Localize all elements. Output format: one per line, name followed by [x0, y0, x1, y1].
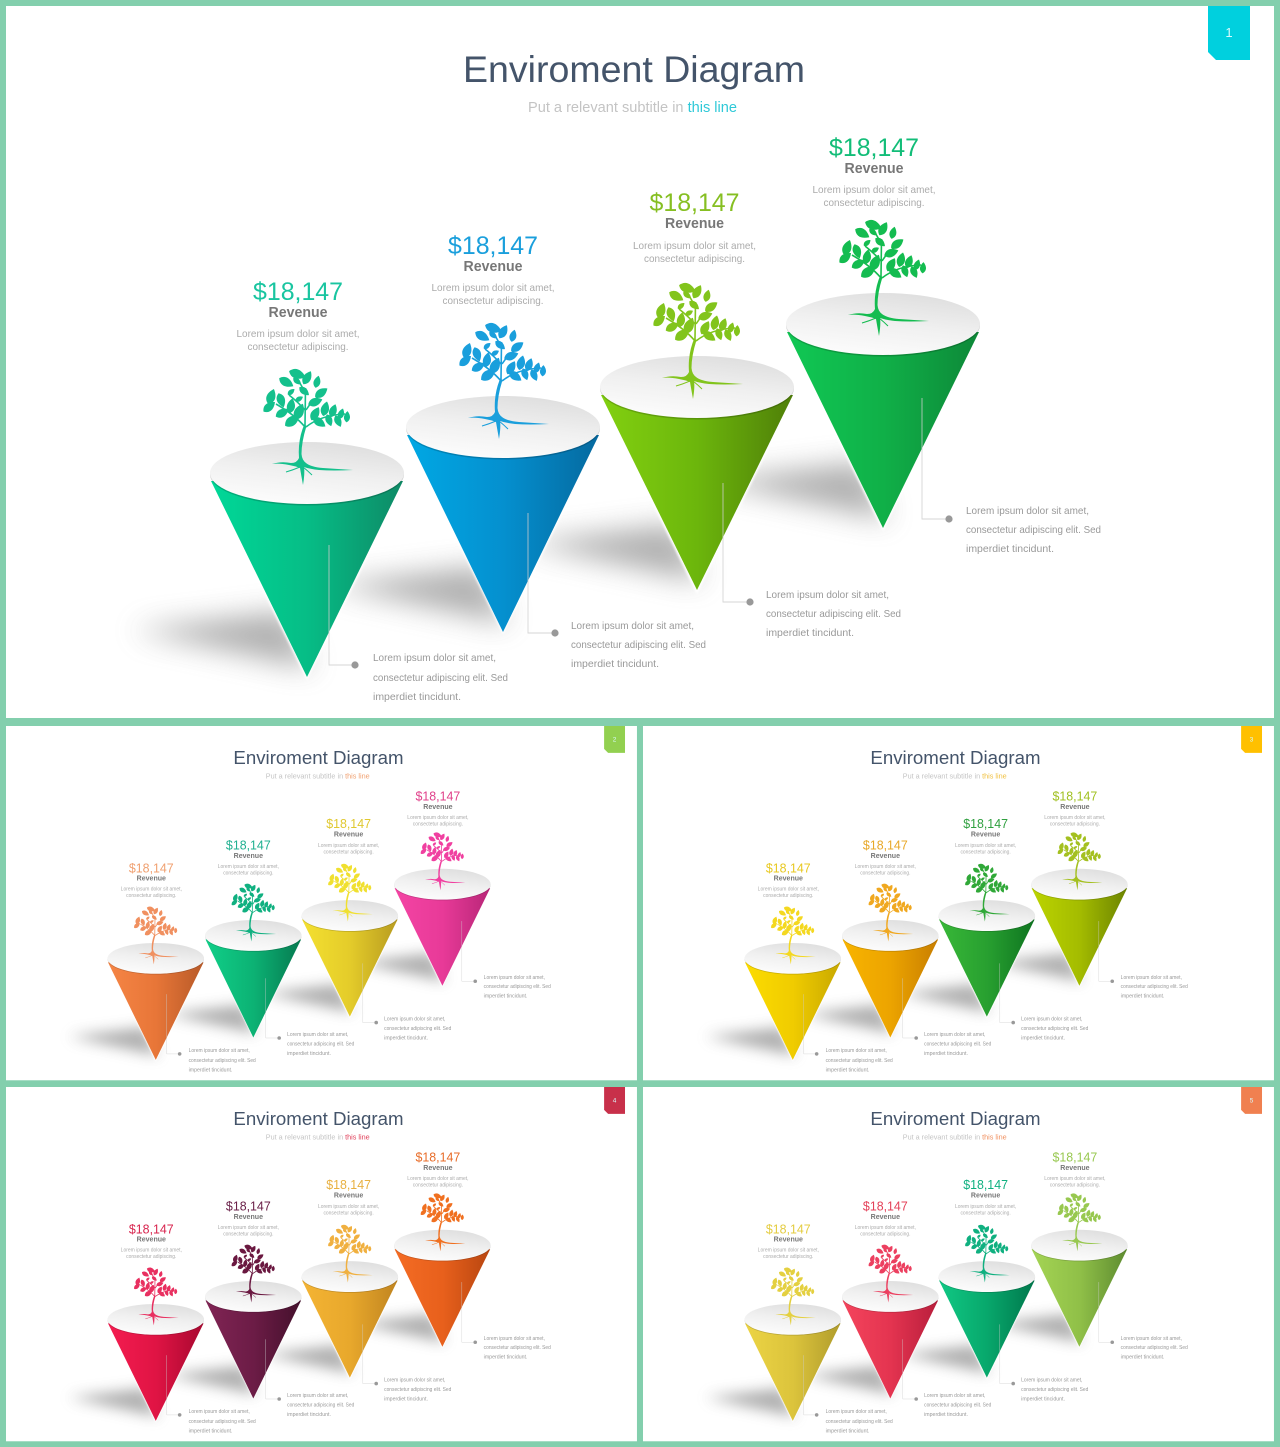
callout 4	[1099, 921, 1188, 1000]
value label 2: Revenue	[871, 1212, 900, 1221]
subtitle: Put a relevant subtitle in this line	[266, 772, 370, 781]
callout 1: consectetur adipiscing elit. Sed	[189, 1419, 256, 1425]
callout 4: imperdiet tincidunt.	[484, 1355, 527, 1361]
callout 3: consectetur adipiscing elit. Sed	[766, 608, 901, 620]
cone 3 with tree	[302, 1224, 398, 1378]
callout 3	[723, 483, 901, 639]
value label 3: consectetur adipiscing.	[960, 1210, 1011, 1216]
cone 2 with tree	[205, 1244, 302, 1398]
page badge	[604, 1087, 625, 1114]
cone 4 with tree	[1031, 1192, 1128, 1347]
title: Enviroment Diagram	[870, 747, 1041, 768]
value label 2: $18,147	[226, 838, 271, 852]
callout 2: imperdiet tincidunt.	[924, 1051, 968, 1057]
value label 1: Revenue	[774, 874, 803, 883]
cone 2 with tree	[842, 883, 939, 1037]
callout 4: Lorem ipsum dolor sit amet,	[1121, 1336, 1182, 1342]
cone 1 with tree	[745, 1266, 841, 1421]
callout 4: consectetur adipiscing elit. Sed	[484, 1345, 551, 1351]
page badge: 2	[613, 736, 617, 743]
callout 4	[462, 921, 551, 1000]
callout 3	[1000, 963, 1088, 1041]
value label 2: consectetur adipiscing.	[442, 295, 544, 307]
value label 4: $18,147	[1053, 790, 1097, 804]
value label 3	[318, 817, 379, 855]
callout 3	[363, 1324, 451, 1402]
value label 3	[955, 1178, 1016, 1216]
value label 1: $18,147	[766, 1222, 811, 1236]
callout 4: consectetur adipiscing elit. Sed	[484, 984, 551, 990]
callout 4: Lorem ipsum dolor sit amet,	[1121, 975, 1182, 981]
value label 3: Revenue	[334, 1190, 363, 1199]
value label 4: consectetur adipiscing.	[413, 1183, 463, 1189]
callout 4: Lorem ipsum dolor sit amet,	[484, 975, 545, 981]
ground shadows	[132, 462, 888, 669]
callout 2: imperdiet tincidunt.	[287, 1412, 331, 1418]
callout 3: Lorem ipsum dolor sit amet,	[1021, 1017, 1082, 1023]
value label 1: consectetur adipiscing.	[248, 341, 348, 353]
value label 4: Lorem ipsum dolor sit amet,	[812, 184, 936, 196]
value label 1: consectetur adipiscing.	[763, 893, 813, 899]
value label 1	[236, 278, 360, 353]
ground shadows	[69, 1314, 445, 1417]
page badge: 4	[613, 1097, 617, 1104]
callout 1: imperdiet tincidunt.	[189, 1428, 232, 1434]
value label 2: $18,147	[863, 838, 908, 852]
callout 2: consectetur adipiscing elit. Sed	[924, 1402, 991, 1408]
callout 4	[922, 398, 1101, 555]
panel: slide 4	[6, 1087, 637, 1441]
value label 1: Revenue	[137, 1235, 166, 1244]
value label 1: $18,147	[129, 1222, 174, 1236]
value label 1: Revenue	[137, 874, 166, 883]
callout 1	[167, 994, 256, 1073]
value label 3: consectetur adipiscing.	[644, 253, 745, 265]
page badge: 5	[1250, 1097, 1254, 1104]
callout 2: imperdiet tincidunt.	[287, 1051, 331, 1057]
callout 1: consectetur adipiscing elit. Sed	[373, 672, 508, 684]
cone 1 with tree	[745, 905, 841, 1060]
cone 3 with tree	[302, 863, 398, 1017]
panel: main slide	[6, 6, 1274, 718]
page badge	[604, 726, 625, 753]
ground shadows	[69, 953, 445, 1056]
value label 4: Revenue	[423, 802, 453, 811]
value label 3: $18,147	[326, 817, 371, 831]
callout 3: Lorem ipsum dolor sit amet,	[1021, 1378, 1082, 1384]
callout 1: Lorem ipsum dolor sit amet,	[373, 652, 496, 664]
callout 2: Lorem ipsum dolor sit amet,	[571, 620, 694, 632]
callout 1	[167, 1355, 256, 1434]
callout 2: consectetur adipiscing elit. Sed	[571, 639, 706, 651]
callout 1: imperdiet tincidunt.	[373, 691, 461, 703]
cone 3 with tree	[939, 863, 1035, 1017]
callout 3: consectetur adipiscing elit. Sed	[384, 1387, 451, 1393]
value label 3: Revenue	[971, 829, 1000, 838]
cone 4 with tree	[394, 831, 491, 986]
value label 2	[855, 1199, 916, 1237]
value label 1: $18,147	[766, 861, 811, 875]
callout 2	[266, 978, 354, 1057]
value label 4: Revenue	[844, 161, 904, 177]
callout 2: imperdiet tincidunt.	[571, 658, 659, 670]
value label 3: consectetur adipiscing.	[323, 849, 374, 855]
value label 3	[633, 189, 756, 265]
value label 3: consectetur adipiscing.	[323, 1210, 374, 1216]
title: Enviroment Diagram	[233, 1108, 404, 1129]
callout 3: imperdiet tincidunt.	[384, 1396, 428, 1402]
value label 2: Revenue	[234, 851, 263, 860]
value label 4: $18,147	[829, 134, 919, 162]
value label 4	[1044, 790, 1106, 828]
value label 4: consectetur adipiscing.	[824, 197, 924, 209]
value label 1	[758, 1222, 819, 1260]
value label 2: consectetur adipiscing.	[223, 870, 273, 876]
value label 3: $18,147	[326, 1178, 371, 1192]
callout 2	[903, 978, 991, 1057]
callout 3: Lorem ipsum dolor sit amet,	[384, 1017, 445, 1023]
value label 2: $18,147	[226, 1199, 271, 1213]
value label 4: $18,147	[416, 790, 460, 804]
callout 3: imperdiet tincidunt.	[766, 627, 854, 639]
callout 2: consectetur adipiscing elit. Sed	[924, 1041, 991, 1047]
callout 1	[804, 994, 893, 1073]
value label 3: Lorem ipsum dolor sit amet,	[955, 1204, 1016, 1210]
callout 1: Lorem ipsum dolor sit amet,	[826, 1048, 887, 1054]
value label 2	[218, 838, 279, 876]
value label 3: $18,147	[650, 189, 740, 217]
callout 1: Lorem ipsum dolor sit amet,	[826, 1409, 887, 1415]
callout 4: imperdiet tincidunt.	[1121, 994, 1164, 1000]
callout 1: consectetur adipiscing elit. Sed	[826, 1058, 893, 1064]
callout 2	[266, 1339, 354, 1418]
cone 4 with tree	[394, 1192, 491, 1347]
callout 2: imperdiet tincidunt.	[924, 1412, 968, 1418]
callout 4	[462, 1282, 551, 1361]
callout 4: Lorem ipsum dolor sit amet,	[484, 1336, 545, 1342]
value label 1: Lorem ipsum dolor sit amet,	[121, 1248, 182, 1254]
callout 1: imperdiet tincidunt.	[189, 1067, 232, 1073]
cone 2 with tree	[406, 321, 600, 632]
callout 4: Lorem ipsum dolor sit amet,	[966, 505, 1089, 517]
value label 3: Revenue	[971, 1190, 1000, 1199]
value label 4: Lorem ipsum dolor sit amet,	[1044, 1176, 1106, 1182]
value label 4: Revenue	[1060, 1163, 1090, 1172]
value label 2	[432, 232, 554, 307]
value label 1: Lorem ipsum dolor sit amet,	[758, 887, 819, 893]
value label 3: $18,147	[963, 1178, 1008, 1192]
callout 4: imperdiet tincidunt.	[484, 994, 527, 1000]
value label 4: Revenue	[1060, 802, 1090, 811]
value label 2	[855, 838, 916, 876]
value label 3	[318, 1178, 379, 1216]
callout 2: consectetur adipiscing elit. Sed	[287, 1402, 354, 1408]
value label 2: Revenue	[464, 259, 522, 275]
callout 2: consectetur adipiscing elit. Sed	[287, 1041, 354, 1047]
cone 2 with tree	[842, 1244, 939, 1398]
page badge: 3	[1250, 736, 1254, 743]
page badge	[1241, 1087, 1262, 1114]
callout 1: imperdiet tincidunt.	[826, 1428, 869, 1434]
value label 4: Lorem ipsum dolor sit amet,	[1044, 815, 1106, 821]
value label 2: Revenue	[871, 851, 900, 860]
page badge: 1	[1225, 25, 1233, 40]
callout 4: imperdiet tincidunt.	[966, 543, 1054, 555]
value label 4: consectetur adipiscing.	[1050, 1183, 1100, 1189]
callout 1: consectetur adipiscing elit. Sed	[189, 1058, 256, 1064]
value label 2: Lorem ipsum dolor sit amet,	[218, 1225, 279, 1231]
cone 3 with tree	[600, 281, 794, 591]
page badge	[1208, 6, 1250, 60]
callout 1: Lorem ipsum dolor sit amet,	[189, 1048, 250, 1054]
value label 3: Revenue	[665, 216, 724, 232]
callout 3: consectetur adipiscing elit. Sed	[1021, 1026, 1088, 1032]
value label 1	[758, 861, 819, 899]
cone 1 with tree	[108, 905, 204, 1060]
value label 4: Revenue	[423, 1163, 453, 1172]
subtitle: Put a relevant subtitle in this line	[903, 1133, 1007, 1142]
subtitle: Put a relevant subtitle in this line	[528, 99, 737, 116]
callout 1: imperdiet tincidunt.	[826, 1067, 869, 1073]
ground shadows	[706, 1314, 1082, 1417]
callout 4: imperdiet tincidunt.	[1121, 1355, 1164, 1361]
value label 2: consectetur adipiscing.	[860, 870, 910, 876]
value label 1: $18,147	[253, 278, 343, 306]
subtitle: Put a relevant subtitle in this line	[266, 1133, 370, 1142]
callout 1	[804, 1355, 893, 1434]
value label 4: $18,147	[1053, 1151, 1097, 1165]
value label 4	[812, 134, 936, 209]
callout 3: Lorem ipsum dolor sit amet,	[384, 1378, 445, 1384]
panel: slide 2	[6, 726, 637, 1080]
callout 3: imperdiet tincidunt.	[1021, 1035, 1065, 1041]
title: Enviroment Diagram	[870, 1108, 1041, 1129]
value label 4: $18,147	[416, 1151, 460, 1165]
value label 2: $18,147	[863, 1199, 908, 1213]
value label 2: $18,147	[448, 232, 538, 260]
value label 3: Lorem ipsum dolor sit amet,	[633, 240, 756, 252]
value label 2: consectetur adipiscing.	[223, 1231, 273, 1237]
page badge	[1241, 726, 1262, 753]
value label 2	[218, 1199, 279, 1237]
callout 1: consectetur adipiscing elit. Sed	[826, 1419, 893, 1425]
value label 1: consectetur adipiscing.	[126, 893, 176, 899]
value label 2: consectetur adipiscing.	[860, 1231, 910, 1237]
value label 4: consectetur adipiscing.	[413, 822, 463, 828]
callout 2: Lorem ipsum dolor sit amet,	[287, 1032, 348, 1038]
value label 4	[407, 1151, 469, 1189]
callout 3: imperdiet tincidunt.	[1021, 1396, 1065, 1402]
cone 1 with tree	[108, 1266, 204, 1421]
value label 2: Lorem ipsum dolor sit amet,	[855, 1225, 916, 1231]
value label 2: Lorem ipsum dolor sit amet,	[855, 864, 916, 870]
value label 2: Lorem ipsum dolor sit amet,	[432, 282, 554, 294]
callout 2: Lorem ipsum dolor sit amet,	[924, 1393, 985, 1399]
value label 3: Revenue	[334, 829, 363, 838]
value label 1: $18,147	[129, 861, 174, 875]
value label 4: Lorem ipsum dolor sit amet,	[407, 815, 469, 821]
ground shadows	[706, 953, 1082, 1056]
cone 1 with tree	[210, 367, 404, 677]
callout 2: Lorem ipsum dolor sit amet,	[924, 1032, 985, 1038]
value label 3: $18,147	[963, 817, 1008, 831]
value label 1: Revenue	[774, 1235, 803, 1244]
callout 3: consectetur adipiscing elit. Sed	[384, 1026, 451, 1032]
callout 3	[363, 963, 451, 1041]
callout 2: Lorem ipsum dolor sit amet,	[287, 1393, 348, 1399]
callout 2	[528, 513, 706, 670]
value label 3: Lorem ipsum dolor sit amet,	[955, 843, 1016, 849]
value label 1	[121, 861, 182, 899]
title: Enviroment Diagram	[463, 49, 805, 90]
callout 4: consectetur adipiscing elit. Sed	[1121, 984, 1188, 990]
callout 3: consectetur adipiscing elit. Sed	[1021, 1387, 1088, 1393]
cone 3 with tree	[939, 1224, 1035, 1378]
value label 1: Lorem ipsum dolor sit amet,	[758, 1248, 819, 1254]
value label 1: Lorem ipsum dolor sit amet,	[236, 328, 360, 340]
value label 1	[121, 1222, 182, 1260]
cone 4 with tree	[1031, 831, 1128, 986]
value label 4: consectetur adipiscing.	[1050, 822, 1100, 828]
panel: slide 5	[643, 1087, 1274, 1441]
callout 4: consectetur adipiscing elit. Sed	[1121, 1345, 1188, 1351]
value label 3: Lorem ipsum dolor sit amet,	[318, 1204, 379, 1210]
value label 1: Revenue	[268, 305, 328, 321]
callout 3: Lorem ipsum dolor sit amet,	[766, 589, 889, 601]
title: Enviroment Diagram	[233, 747, 404, 768]
value label 1: consectetur adipiscing.	[126, 1254, 176, 1260]
value label 3: consectetur adipiscing.	[960, 849, 1011, 855]
cone 2 with tree	[205, 883, 302, 1037]
cone 4 with tree	[786, 218, 980, 528]
callout 3: imperdiet tincidunt.	[384, 1035, 428, 1041]
value label 2: Lorem ipsum dolor sit amet,	[218, 864, 279, 870]
value label 3	[955, 817, 1016, 855]
subtitle: Put a relevant subtitle in this line	[903, 772, 1007, 781]
panel: slide 3	[643, 726, 1274, 1080]
callout 4	[1099, 1282, 1188, 1361]
value label 4	[407, 790, 469, 828]
value label 1: Lorem ipsum dolor sit amet,	[121, 887, 182, 893]
value label 1: consectetur adipiscing.	[763, 1254, 813, 1260]
callout 4: consectetur adipiscing elit. Sed	[966, 524, 1101, 536]
value label 3: Lorem ipsum dolor sit amet,	[318, 843, 379, 849]
callout 1	[329, 545, 508, 703]
callout 2	[903, 1339, 991, 1418]
callout 3	[1000, 1324, 1088, 1402]
callout 1: Lorem ipsum dolor sit amet,	[189, 1409, 250, 1415]
value label 4	[1044, 1151, 1106, 1189]
value label 2: Revenue	[234, 1212, 263, 1221]
value label 4: Lorem ipsum dolor sit amet,	[407, 1176, 469, 1182]
